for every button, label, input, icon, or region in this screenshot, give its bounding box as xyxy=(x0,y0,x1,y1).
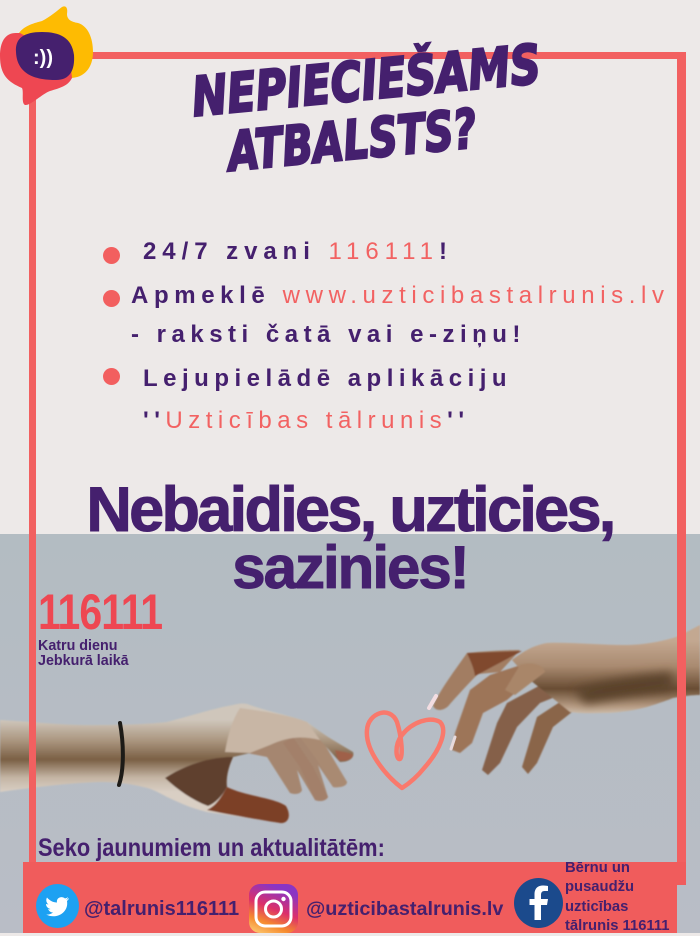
website line: Apmeklē www.uzticibastalrunis.lv xyxy=(131,282,670,309)
facebook label: uzticības xyxy=(565,899,628,915)
slogan: Nebaidies, uzticies, xyxy=(86,475,614,545)
title: NEPIECIEŠAMS xyxy=(189,33,543,129)
bullet 1 xyxy=(103,247,120,264)
icon: twitter xyxy=(36,884,79,928)
facebook label xyxy=(565,860,670,934)
wristband xyxy=(119,723,123,785)
bullet 3 xyxy=(103,368,120,385)
app line: Lejupielādē aplikāciju xyxy=(143,365,512,392)
call line: 24/7 zvani 116111! xyxy=(143,238,453,265)
photo background with hands xyxy=(0,534,700,933)
social bar xyxy=(23,862,677,933)
twitter handle: @talrunis116111 xyxy=(84,898,239,920)
icon: instagram xyxy=(249,884,298,933)
heart xyxy=(367,713,443,788)
availability xyxy=(38,638,129,669)
facebook label: Bērnu un xyxy=(565,860,630,876)
instagram handle: @uzticibastalrunis.lv xyxy=(306,898,503,920)
facebook label: tālrunis 116111 xyxy=(565,918,669,934)
app name line: ''Uzticības tālrunis'' xyxy=(143,407,470,434)
follow heading: Seko jaunumiem un aktualitātēm: xyxy=(38,834,385,862)
facebook label: pusaudžu xyxy=(565,879,634,895)
slogan: sazinies! xyxy=(232,534,468,601)
left hand xyxy=(0,704,353,823)
availability: Katru dienu xyxy=(38,638,117,654)
logo: speech bubbles xyxy=(0,6,93,105)
icon: facebook xyxy=(514,878,563,928)
availability: Jebkurā laikā xyxy=(38,653,129,669)
title: ATBALSTS? xyxy=(225,97,479,184)
right hand xyxy=(433,625,700,775)
phone number: 116111 xyxy=(38,584,162,640)
chat line: - raksti čatā vai e-ziņu! xyxy=(131,321,526,348)
fingernails xyxy=(429,696,455,749)
bullet 2 xyxy=(103,290,120,307)
title xyxy=(189,33,543,184)
support list xyxy=(103,238,670,434)
slogan xyxy=(86,475,614,601)
logo: speech bubbles: :)) xyxy=(33,47,53,69)
